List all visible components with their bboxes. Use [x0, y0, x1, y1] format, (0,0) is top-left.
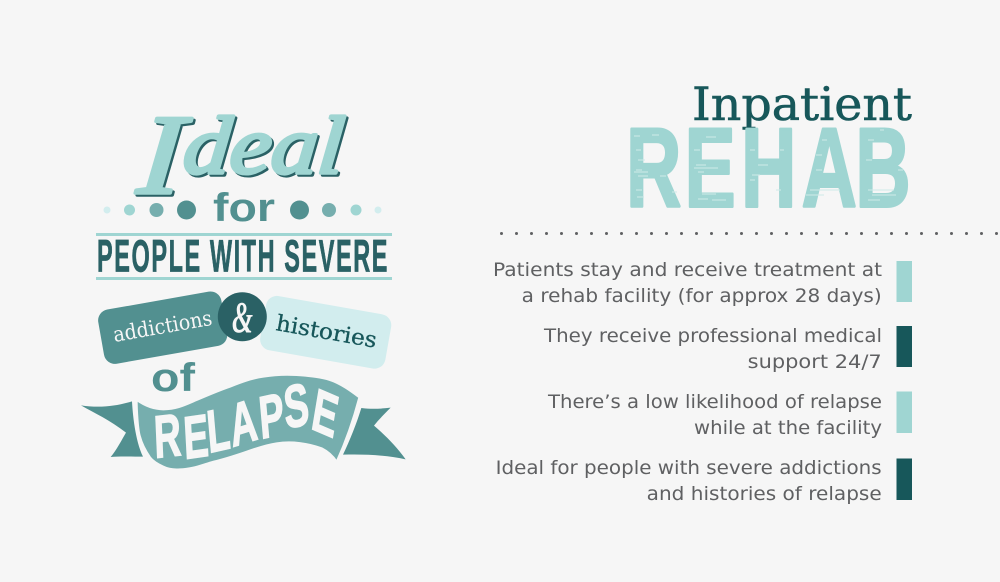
heading: Ideal script — [133, 91, 349, 218]
heading: Ideal script: deal — [180, 100, 348, 191]
label: histories: histories — [274, 311, 379, 354]
banner: relapse ribbon — [81, 370, 406, 472]
ribbon tails and body — [81, 375, 406, 469]
heading: Ideal script shadow: deal — [182, 102, 350, 193]
label: addictions: addictions — [111, 306, 214, 347]
list item 1 — [493, 259, 912, 307]
list item 3: while at the facility — [694, 417, 882, 439]
badge: ampersand: & — [232, 293, 253, 342]
panel: ideal for people lettering — [96, 91, 392, 282]
list item 4: and histories of relapse — [647, 483, 882, 505]
list item 3 — [547, 391, 912, 439]
list item 2: They receive professional medical — [543, 325, 882, 347]
list item 3: There’s a low likelihood of relapse — [547, 391, 882, 413]
badge: ampersand — [218, 292, 267, 342]
list item 2: support 24/7 — [748, 351, 882, 373]
ribbon text: RELAPSE — [153, 370, 343, 472]
distress texture on REHAB — [634, 130, 903, 200]
heading: Ideal script: I — [133, 91, 195, 218]
heading: Ideal script shadow — [135, 93, 351, 220]
text: people with severe — [96, 230, 392, 282]
decorative dots row — [104, 200, 382, 220]
label: addictions — [96, 290, 229, 366]
text: for: for — [213, 186, 275, 230]
list item 1: a rehab facility (for approx 28 days) — [522, 285, 882, 307]
panel: inpatient rehab title — [626, 77, 913, 231]
text: people with severe: PEOPLE WITH SEVERE — [97, 230, 389, 282]
list item 1: Patients stay and receive treatment at — [493, 259, 882, 281]
list item 4: Ideal for people with severe addictions — [496, 457, 882, 479]
dotted divider — [502, 232, 1000, 235]
list item 4 — [496, 457, 912, 505]
heading: Ideal script shadow: I — [135, 93, 197, 220]
heading: Inpatient: Inpatient — [692, 77, 913, 131]
label: histories — [258, 294, 393, 370]
heading: REHAB: REHAB — [626, 106, 910, 231]
text: of: of — [151, 356, 196, 400]
list item 2 — [543, 325, 912, 373]
